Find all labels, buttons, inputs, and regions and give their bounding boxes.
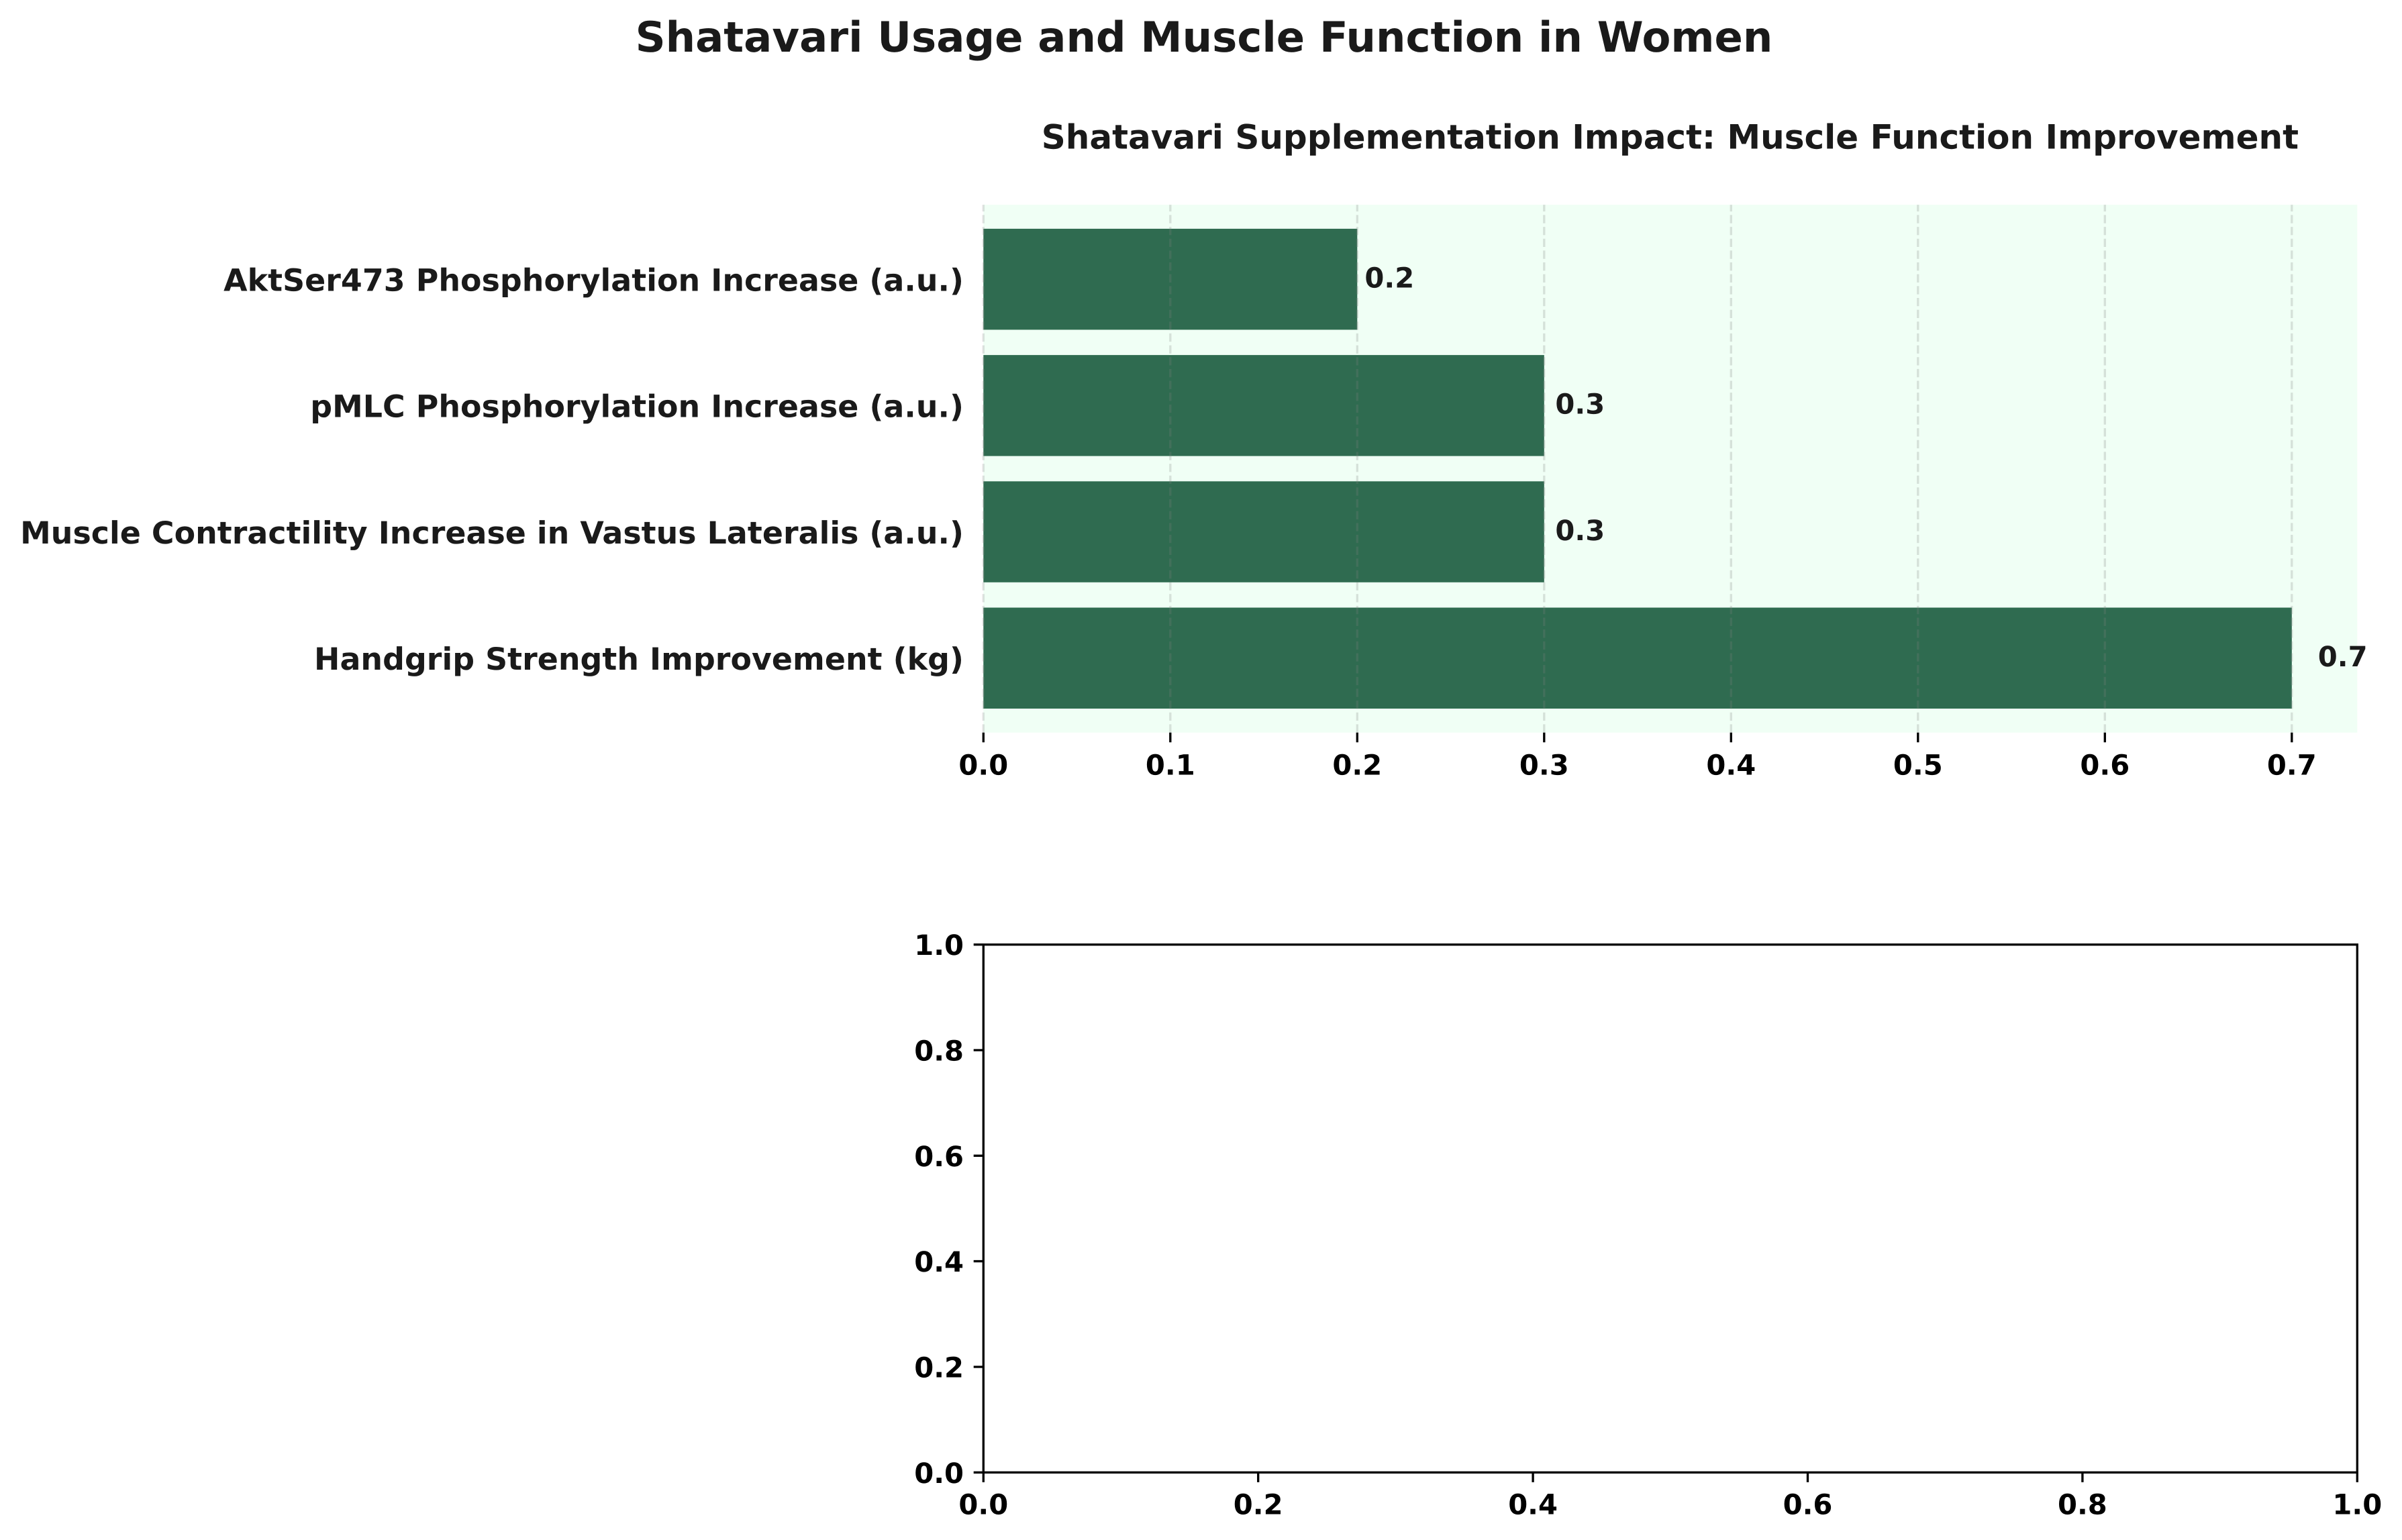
panel: muscle function improvement bar chart [20,117,2368,781]
label: muscle contractility: Muscle Contractility Increase in Vastus Lateralis (a.u.) [20,515,964,551]
y axis labels: 0.0 [914,1457,964,1490]
x axis labels [958,748,2317,781]
title: Shatavari Usage and Muscle Function in Women [636,13,1772,62]
vertical grid lines [983,205,2292,733]
y axis labels: 0.2 [914,1351,964,1384]
x axis labels: 0.5 [1893,748,1943,781]
x axis labels: 1.0 [2332,1488,2382,1521]
value: 0.3: 0.3 [1555,514,1605,547]
label: AktSer473: AktSer473 Phosphorylation Increase (a.u.) [223,262,964,298]
panel: empty axes [914,929,2382,1521]
x axis ticks [983,1472,2357,1482]
x axis labels: 0.6 [2080,748,2130,781]
value labels [1364,261,2368,673]
x axis labels: 0.0 [958,748,1008,781]
y axis labels: 0.6 [914,1140,964,1173]
x axis labels: 0.0 [958,1488,1008,1521]
label: pMLC: pMLC Phosphorylation Increase (a.u.) [310,389,964,425]
bars [983,229,2292,709]
x axis labels: 0.3 [1519,748,1569,781]
y axis labels [914,929,964,1490]
x axis labels [958,1488,2382,1521]
value: 0.2: 0.2 [1364,261,1414,294]
x axis labels: 0.1 [1146,748,1195,781]
bar: muscle contractility [983,481,1544,582]
bar: AktSer473 [983,229,1357,329]
x axis labels: 0.8 [2058,1488,2107,1521]
bar: handgrip strength [983,608,2292,709]
label: handgrip strength: Handgrip Strength Improvement (kg) [314,641,964,677]
x axis labels: 0.2 [1332,748,1382,781]
category labels [20,262,964,677]
plot background [983,205,2357,733]
axes frame [983,945,2357,1472]
x axis labels: 0.6 [1783,1488,1832,1521]
panel heading: Shatavari Supplementation Impact: Muscle Function Improvement [1042,117,2299,156]
value: 0.7: 0.7 [2318,640,2368,673]
value: 0.3: 0.3 [1555,388,1605,421]
y axis labels: 0.8 [914,1035,964,1067]
x axis ticks [983,733,2292,742]
x axis labels: 0.4 [1508,1488,1558,1521]
y axis labels: 1.0 [914,929,964,962]
x axis labels: 0.4 [1706,748,1756,781]
y axis ticks [974,945,983,1472]
x axis labels: 0.7 [2267,748,2317,781]
x axis labels: 0.2 [1234,1488,1283,1521]
bar: pMLC [983,355,1544,456]
y axis labels: 0.4 [914,1245,964,1278]
